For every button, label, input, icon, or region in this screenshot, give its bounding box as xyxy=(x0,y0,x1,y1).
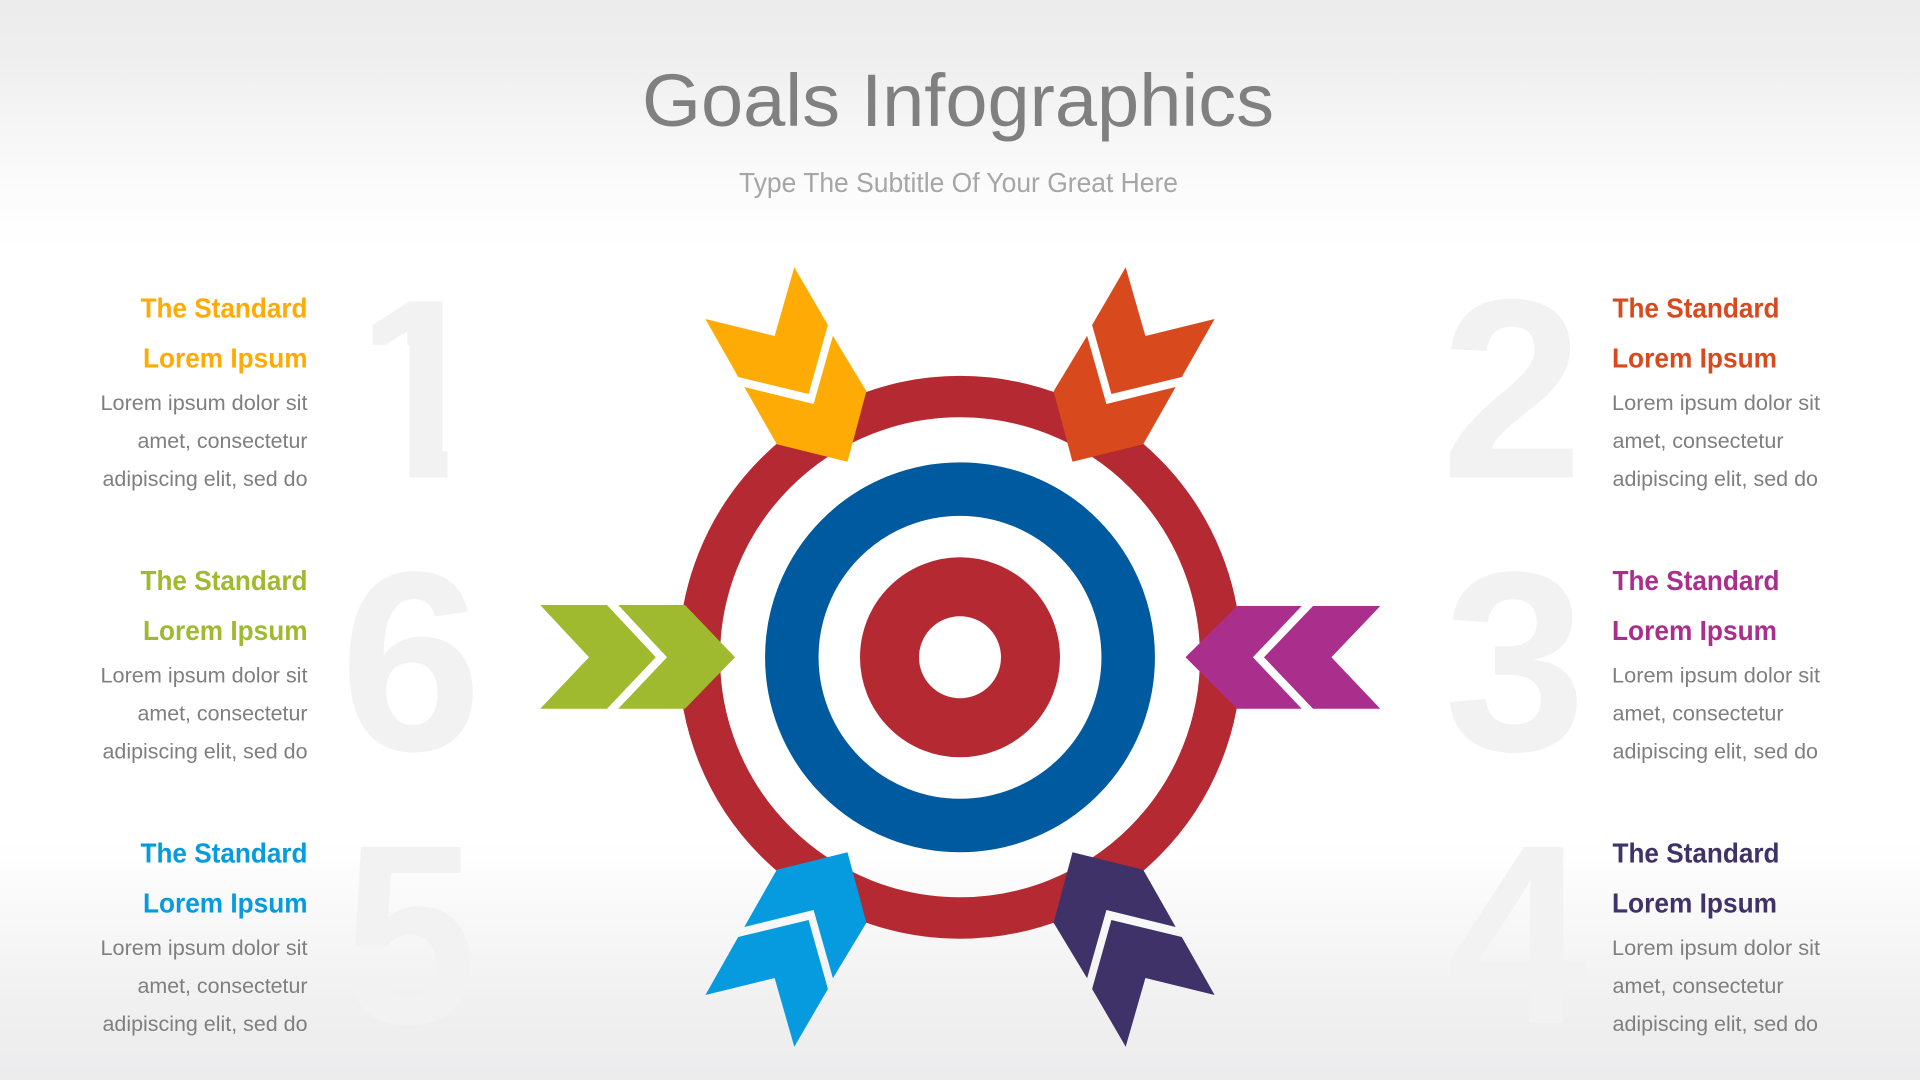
heading: goal 1 xyxy=(140,293,308,374)
body text: goal 2 xyxy=(1612,392,1820,491)
body text: goal 5: adipiscing elit, sed do xyxy=(102,1013,308,1036)
arrow 4: navy, bottom right xyxy=(1054,852,1215,1047)
heading: goal 2 xyxy=(1612,293,1780,374)
body text: goal 1: adipiscing elit, sed do xyxy=(102,468,308,491)
number 5: 5 xyxy=(343,792,477,1078)
arrow 3: purple, right xyxy=(1186,606,1380,709)
body text: goal 2: adipiscing elit, sed do xyxy=(1612,468,1818,491)
arrow 6: green, left xyxy=(540,605,735,709)
body text: goal 6: amet, consectetur xyxy=(138,702,308,725)
heading: goal 3: Lorem Ipsum xyxy=(1612,615,1777,646)
body text: goal 3: adipiscing elit, sed do xyxy=(1612,740,1818,763)
heading: goal 5 xyxy=(140,838,308,919)
body text: goal 6 xyxy=(100,664,308,763)
heading: goal 6: The Standard xyxy=(140,565,308,596)
body text: goal 2: amet, consectetur xyxy=(1612,430,1784,453)
body text: goal 4: Lorem ipsum dolor sit xyxy=(1612,937,1820,960)
body text: goal 2: Lorem ipsum dolor sit xyxy=(1612,392,1820,415)
heading: goal 2: Lorem Ipsum xyxy=(1612,343,1777,374)
body text: goal 1 xyxy=(100,392,308,491)
body text: goal 3: Lorem ipsum dolor sit xyxy=(1612,664,1820,687)
body text: goal 1: Lorem ipsum dolor sit xyxy=(100,392,308,415)
panel: goal 6 xyxy=(100,519,482,805)
target: blue ring xyxy=(792,489,1128,826)
heading: goal 1: The Standard xyxy=(140,293,308,324)
body text: goal 3: amet, consectetur xyxy=(1612,702,1784,725)
target: outer red ring xyxy=(699,397,1221,918)
arrow 2: orange, top right xyxy=(1054,267,1215,462)
heading: goal 4: The Standard xyxy=(1612,838,1780,869)
panel: goal 5 xyxy=(100,792,477,1078)
heading: goal 2: The Standard xyxy=(1612,293,1780,324)
heading: goal 6 xyxy=(140,565,308,646)
panel: goal 2 xyxy=(1441,246,1820,532)
heading: goal 5: The Standard xyxy=(140,838,308,869)
number 2: 2 xyxy=(1441,246,1583,532)
target: red centre ring xyxy=(890,587,1030,728)
heading: goal 1: Lorem Ipsum xyxy=(143,343,308,374)
panel: goal 4 xyxy=(1446,792,1820,1078)
number 6: 6 xyxy=(340,519,482,805)
arrow 5: blue, bottom left xyxy=(705,852,866,1047)
body text: goal 1: amet, consectetur xyxy=(138,430,308,453)
target xyxy=(699,397,1221,918)
body text: goal 3 xyxy=(1612,664,1820,763)
heading: goal 3: The Standard xyxy=(1612,565,1780,596)
title: Goals Infographics xyxy=(642,59,1274,142)
heading: goal 5: Lorem Ipsum xyxy=(143,888,308,919)
panel: goal 1 xyxy=(102,298,448,490)
body text: goal 4 xyxy=(1612,937,1820,1036)
number 4: 4 xyxy=(1446,792,1588,1078)
heading: goal 3 xyxy=(1612,565,1780,646)
body text: goal 5 xyxy=(100,937,308,1036)
number 1: 1 xyxy=(348,246,490,532)
panel: goal 3 xyxy=(1444,519,1820,805)
body text: goal 6: Lorem ipsum dolor sit xyxy=(100,664,308,687)
subtitle: Type The Subtitle Of Your Great Here xyxy=(739,167,1178,198)
heading: goal 6: Lorem Ipsum xyxy=(143,615,308,646)
heading: goal 4 xyxy=(1612,838,1780,919)
body text: goal 4: adipiscing elit, sed do xyxy=(1612,1013,1818,1036)
arrow 1: yellow, top left xyxy=(705,267,866,462)
body text: goal 6: adipiscing elit, sed do xyxy=(102,740,308,763)
number 3: 3 xyxy=(1444,519,1586,805)
body text: goal 4: amet, consectetur xyxy=(1612,975,1784,998)
body text: goal 5: amet, consectetur xyxy=(138,975,308,998)
body text: goal 5: Lorem ipsum dolor sit xyxy=(100,937,308,960)
heading: goal 4: Lorem Ipsum xyxy=(1612,888,1777,919)
